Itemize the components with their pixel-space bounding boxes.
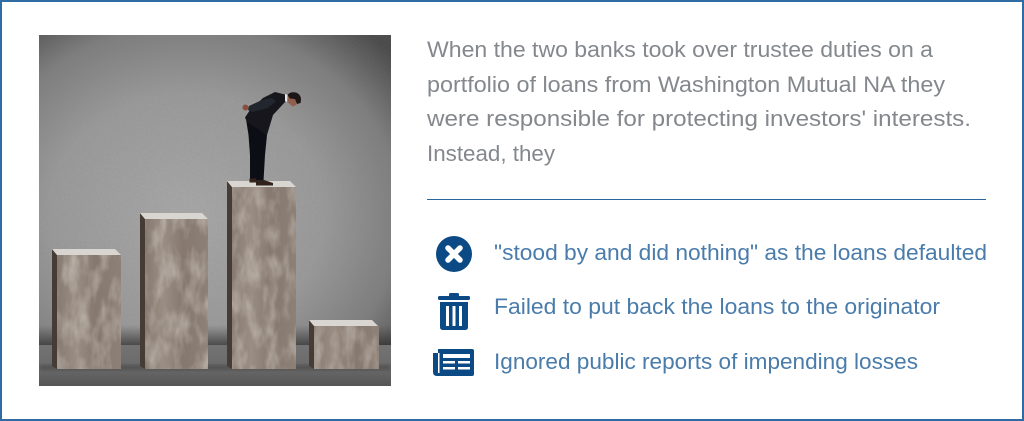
shoes xyxy=(250,178,256,182)
bar 4 xyxy=(309,320,379,369)
item text: "stood by and did nothing" as the loans defaulted xyxy=(494,240,987,265)
intro paragraph: portfolio of loans from Washington Mutual NA they xyxy=(427,72,945,97)
torso xyxy=(245,92,286,135)
intro paragraph: were responsible for protecting investors' interests. xyxy=(426,106,971,131)
collar xyxy=(285,94,288,102)
item: stood by xyxy=(436,236,987,272)
floor xyxy=(39,345,391,386)
intro paragraph: Instead, they xyxy=(427,141,555,166)
bar 2 xyxy=(140,213,208,369)
hair xyxy=(288,92,301,104)
icon: newspaper xyxy=(433,349,474,376)
icon: trash can xyxy=(438,293,470,330)
item: failed to put back xyxy=(438,293,940,330)
arm xyxy=(248,98,276,112)
bar 3 xyxy=(227,181,296,369)
wall xyxy=(39,35,391,345)
businessman xyxy=(242,92,301,186)
hands xyxy=(242,104,248,110)
intro paragraph: When the two banks took over trustee duties on a xyxy=(427,37,934,62)
item text: Ignored public reports of impending losses xyxy=(494,349,918,374)
photo: businessman on concrete bar chart xyxy=(39,35,391,386)
item: ignored reports xyxy=(433,349,918,376)
legs xyxy=(246,119,267,181)
item text: Failed to put back the loans to the originator xyxy=(494,294,940,319)
bar 1 xyxy=(52,249,121,369)
intro paragraph xyxy=(426,37,971,166)
divider xyxy=(427,199,986,200)
icon: x in circle xyxy=(436,236,472,272)
face xyxy=(288,95,296,106)
